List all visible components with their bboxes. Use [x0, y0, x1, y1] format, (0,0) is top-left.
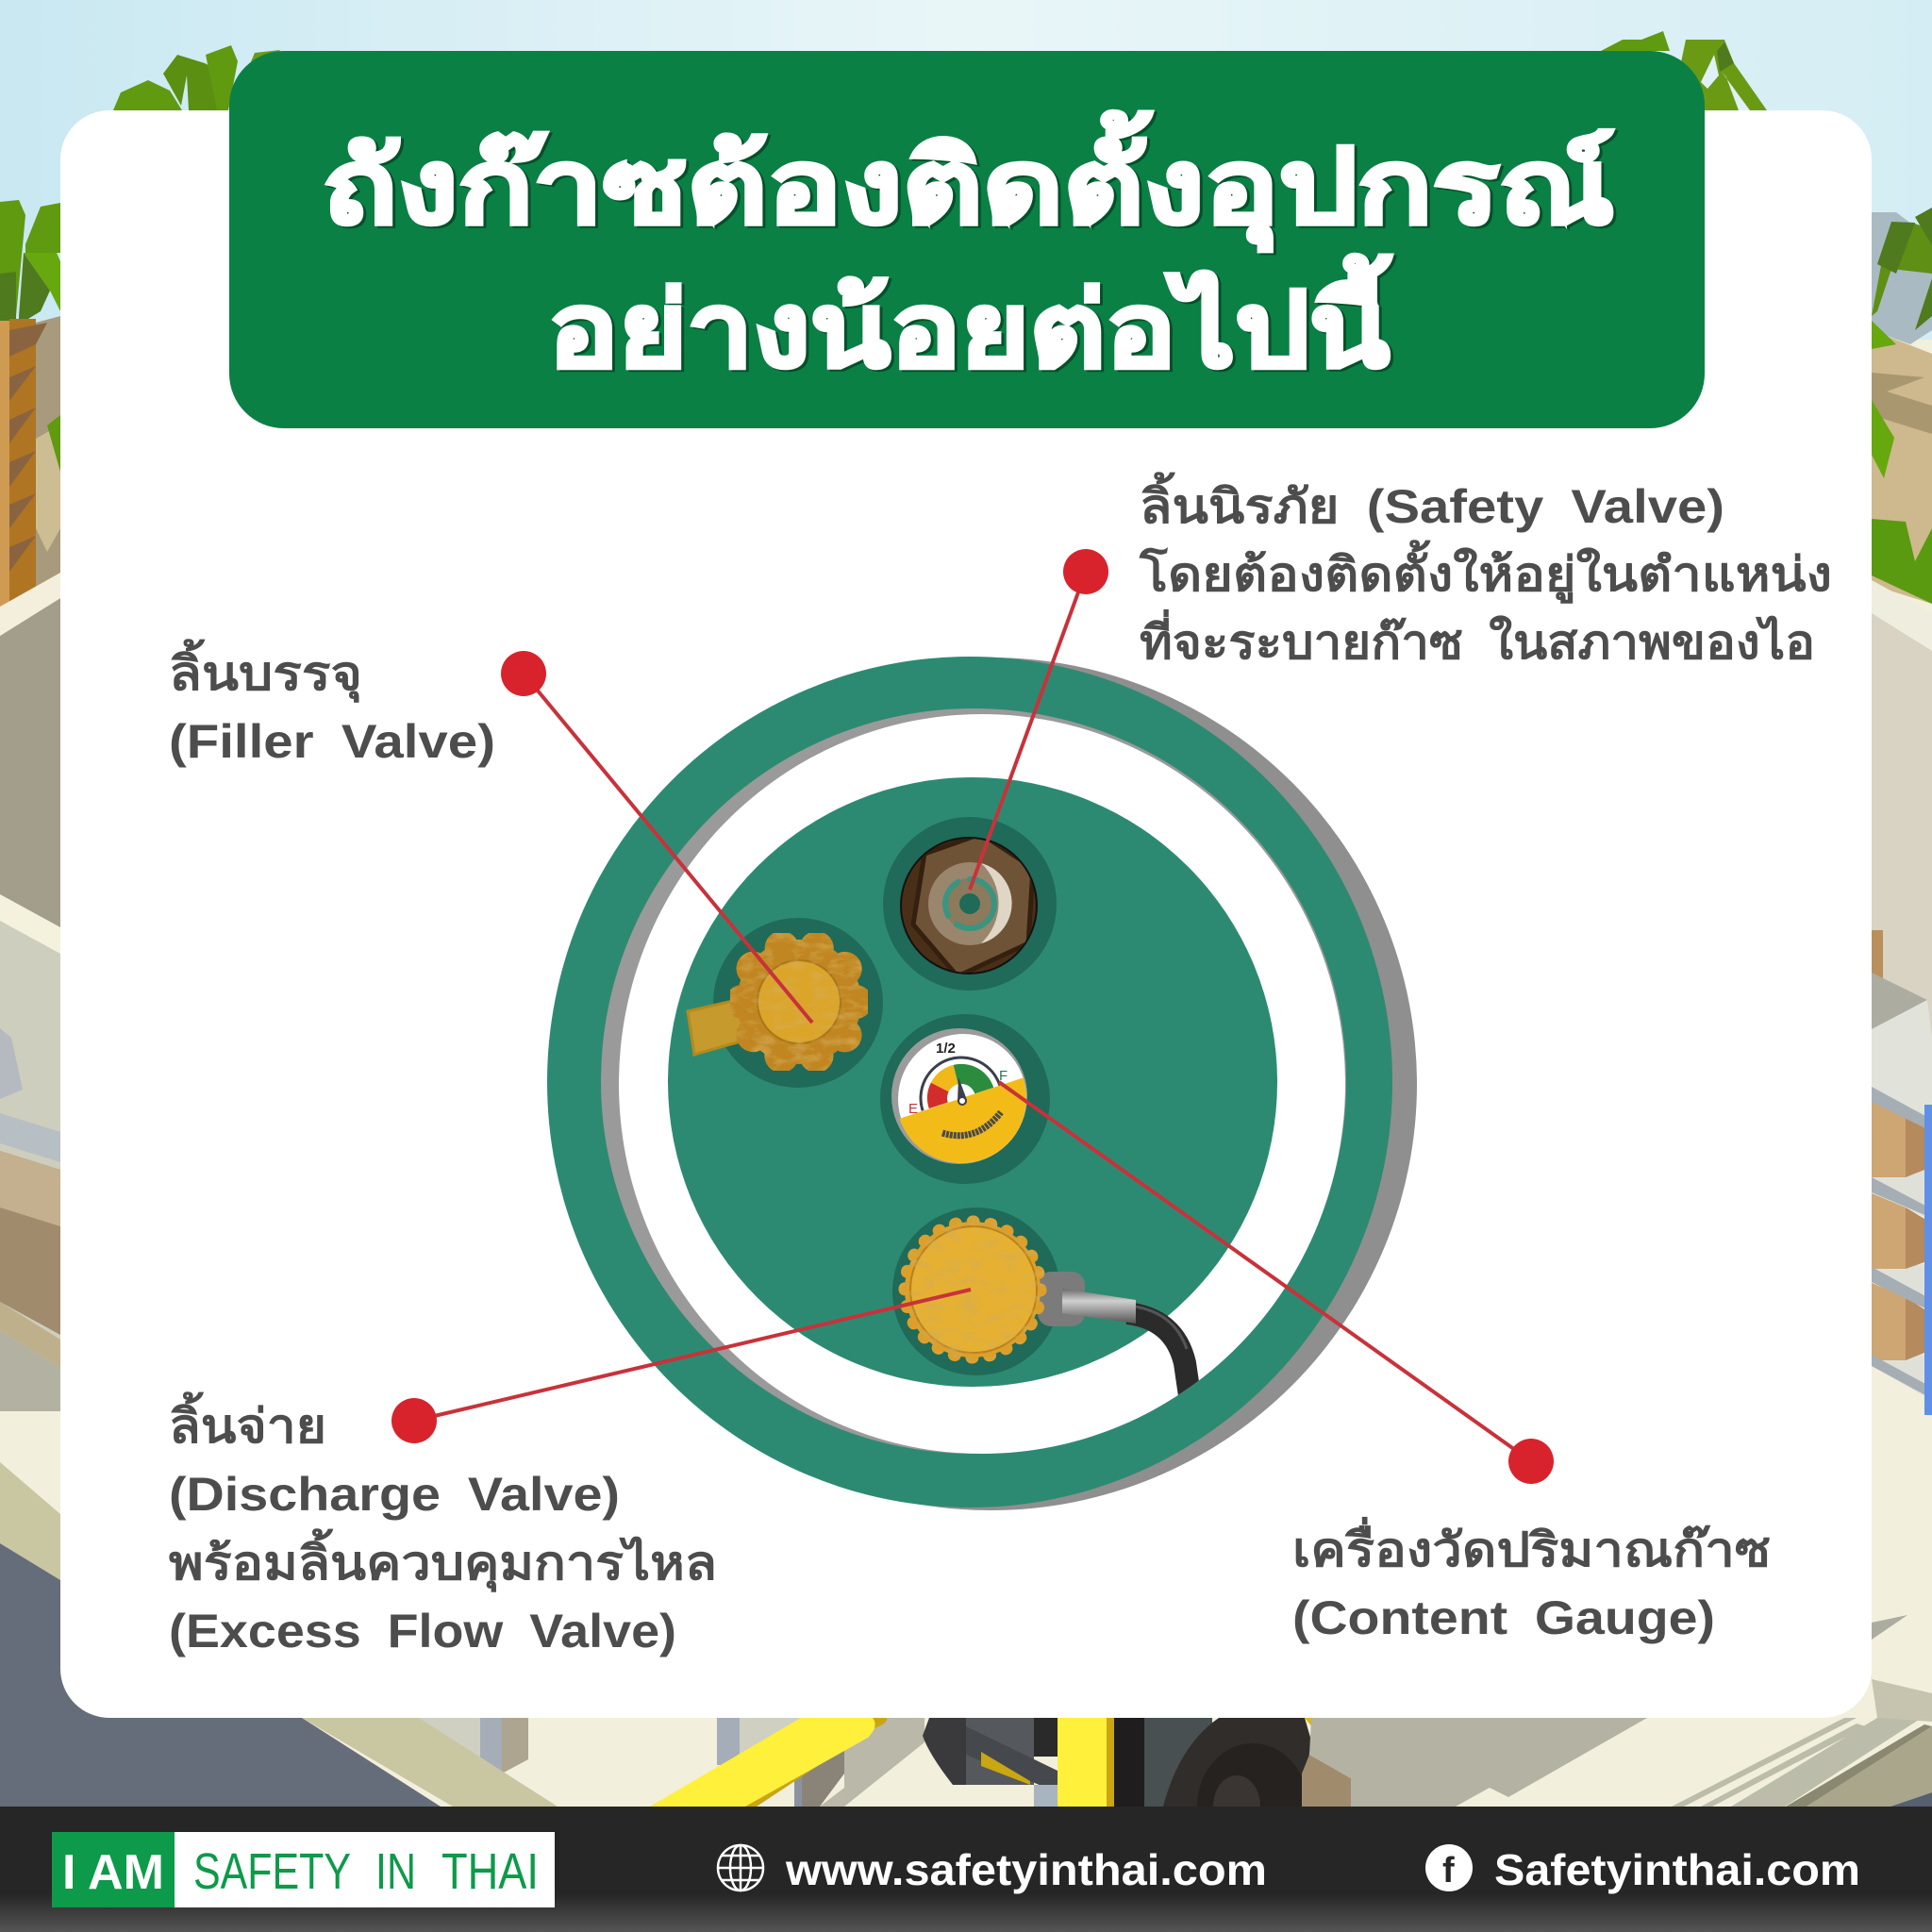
background right: mountains and palms: [1872, 208, 1932, 660]
valve: content gauge: E: [908, 1101, 918, 1117]
logo: THAI: [441, 1843, 539, 1900]
valve: safety valve: [883, 817, 1057, 991]
label: discharge valve: (Discharge Valve): [169, 1468, 620, 1521]
label: content gauge: เครื่องวัดปริมาณก๊าซ: [1292, 1517, 1771, 1576]
background left: palm trunk: [0, 319, 47, 608]
valve: filler valve: [688, 918, 883, 1088]
background left: palm leaves: [0, 200, 60, 325]
panel: white card: [60, 110, 1872, 1718]
title shadow line 2: อย่างน้อยต่อไปนี้: [551, 256, 1394, 391]
leader: discharge valve: [391, 1290, 971, 1443]
background right: wall and rack: [1872, 613, 1932, 1640]
logo: SAFETY: [193, 1843, 351, 1900]
gauge dial: [919, 1057, 1000, 1111]
background left: hill behind palm: [0, 316, 60, 613]
hose: [1127, 1307, 1192, 1415]
floor grey panel: [419, 1718, 480, 1774]
leader: filler valve: [501, 651, 812, 1023]
label: discharge valve: (Excess Flow Valve): [169, 1605, 676, 1657]
valve: content gauge: F: [999, 1068, 1008, 1084]
title line 2: อย่างน้อยต่อไปนี้: [548, 254, 1391, 389]
diagram: tank top: [547, 657, 1417, 1510]
title shadow line 1: ถังก๊าซต้องติดตั้งอุปกรณ์: [325, 112, 1617, 254]
logo: [52, 1832, 555, 1907]
label: filler valve: (Filler Valve): [169, 715, 495, 768]
title panel: [229, 51, 1705, 428]
label: safety valve: ที่จะระบายก๊าซ ในสภาพของไอ: [1140, 609, 1815, 669]
leader lines and dots: [391, 549, 1554, 1484]
footer bar: [0, 1807, 1932, 1932]
label: safety valve: ลิ้นนิรภัย (Safety Valve): [1140, 472, 1724, 533]
valve: discharge valve: [892, 1208, 1136, 1375]
icon: globe: [718, 1845, 763, 1890]
background top: palms behind header: [113, 31, 1767, 110]
background bottom: floor and forklift: [0, 1679, 1932, 1870]
leader: content gauge: [999, 1082, 1554, 1484]
filler gear: [737, 940, 861, 1064]
yellow fork: [745, 1718, 887, 1807]
valve: content gauge: 1/2: [936, 1041, 956, 1057]
background left: wall and shelves: [0, 573, 118, 1807]
website text: www.safetyinthai.com: [785, 1845, 1267, 1894]
label: safety valve: [1139, 472, 1832, 669]
leader: safety valve: [970, 549, 1108, 890]
tank white hollow: [619, 714, 1345, 1454]
tank inner green plate: [668, 777, 1277, 1387]
floor stripes: [1672, 1718, 1922, 1807]
logo: IN: [375, 1843, 416, 1900]
label: content gauge: [1292, 1517, 1771, 1644]
forklift front wheel: [923, 1718, 966, 1785]
label: content gauge: (Content Gauge): [1292, 1591, 1715, 1644]
label: safety valve: โดยต้องติดตั้งให้อยู่ในตำแหน่ง: [1139, 540, 1832, 604]
valve: content gauge: [880, 1014, 1050, 1184]
icon: facebook: [1425, 1844, 1473, 1891]
tank inner gray rim: [601, 708, 1346, 1454]
rack rails: [1872, 1087, 1927, 1396]
icon: facebook: f: [1442, 1851, 1455, 1890]
rack boxes: [1872, 1099, 1906, 1360]
logo: I AM: [62, 1845, 164, 1900]
discharge fitting: [1038, 1272, 1136, 1326]
label: discharge valve: ลิ้นจ่าย: [169, 1391, 326, 1453]
facebook text: Safetyinthai.com: [1494, 1845, 1860, 1894]
label: discharge valve: พร้อมลิ้นควบคุมการไหล: [169, 1528, 717, 1592]
tank outer green ring: [547, 657, 1392, 1507]
label: filler valve: ลิ้นบรรจุ: [169, 639, 362, 703]
title line 1: ถังก๊าซต้องติดตั้งอุปกรณ์: [323, 110, 1614, 252]
label: filler valve: [169, 639, 495, 768]
filler tab: [688, 998, 755, 1055]
discharge gear: [905, 1222, 1041, 1357]
label: discharge valve: [169, 1391, 717, 1657]
tank outer gray rim: [564, 658, 1417, 1510]
